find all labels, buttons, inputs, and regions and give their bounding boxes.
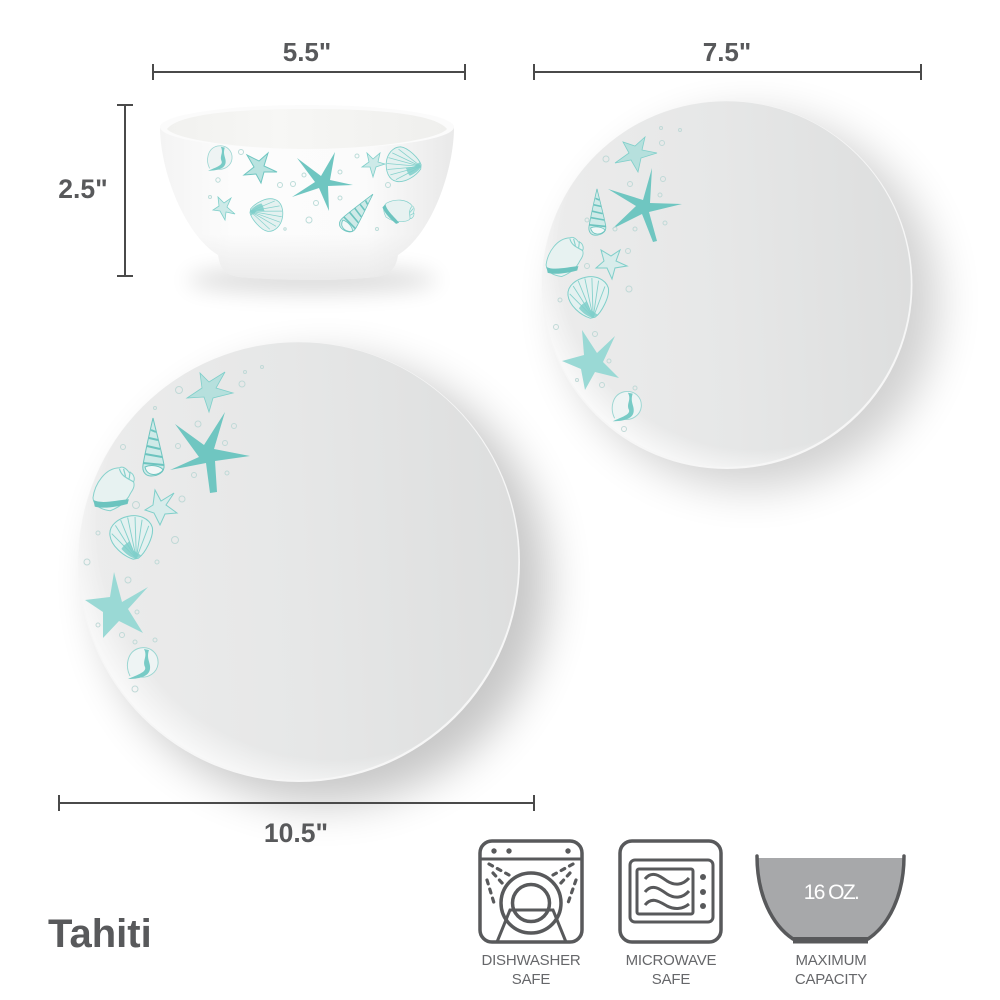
label: microwave safe: SAFE <box>652 971 690 988</box>
icon: dishwasher safe <box>480 841 582 942</box>
label: microwave safe: MICROWAVE <box>626 952 717 969</box>
dimension: bowl width: 5.5" <box>283 37 331 67</box>
bowl pattern <box>208 146 422 235</box>
bowl body <box>160 127 454 280</box>
plate: large 10.5 inch <box>78 342 520 782</box>
dimension: small plate <box>534 37 921 80</box>
icon: maximum capacity bowl <box>757 856 904 944</box>
label: maximum capacity: MAXIMUM <box>795 952 867 969</box>
dimension: large plate <box>59 795 534 848</box>
bowl interior <box>167 109 447 149</box>
plate rim <box>78 342 520 782</box>
bowl rim <box>160 105 454 149</box>
dimension: bowl width <box>153 37 465 80</box>
icon: microwave safe <box>620 841 721 942</box>
plate pattern <box>544 126 682 432</box>
label: maximum capacity: CAPACITY <box>795 971 867 988</box>
dimension: large plate: 10.5" <box>264 818 328 848</box>
icon: maximum capacity bowl: 16 OZ. <box>804 881 858 904</box>
plate well <box>79 342 518 780</box>
plate rim <box>542 101 912 469</box>
title: Tahiti <box>48 912 152 956</box>
label: dishwasher safe: DISHWASHER <box>481 952 581 969</box>
label: dishwasher safe: SAFE <box>512 971 550 988</box>
dimension: small plate: 7.5" <box>703 37 751 67</box>
bowl <box>160 105 454 280</box>
plate shadows <box>100 116 938 804</box>
plate well <box>542 101 911 467</box>
dimension: bowl height <box>58 105 133 276</box>
dimension: bowl height: 2.5" <box>58 174 108 204</box>
plate: small 7.5 inch <box>542 101 912 469</box>
plate pattern <box>84 366 264 692</box>
